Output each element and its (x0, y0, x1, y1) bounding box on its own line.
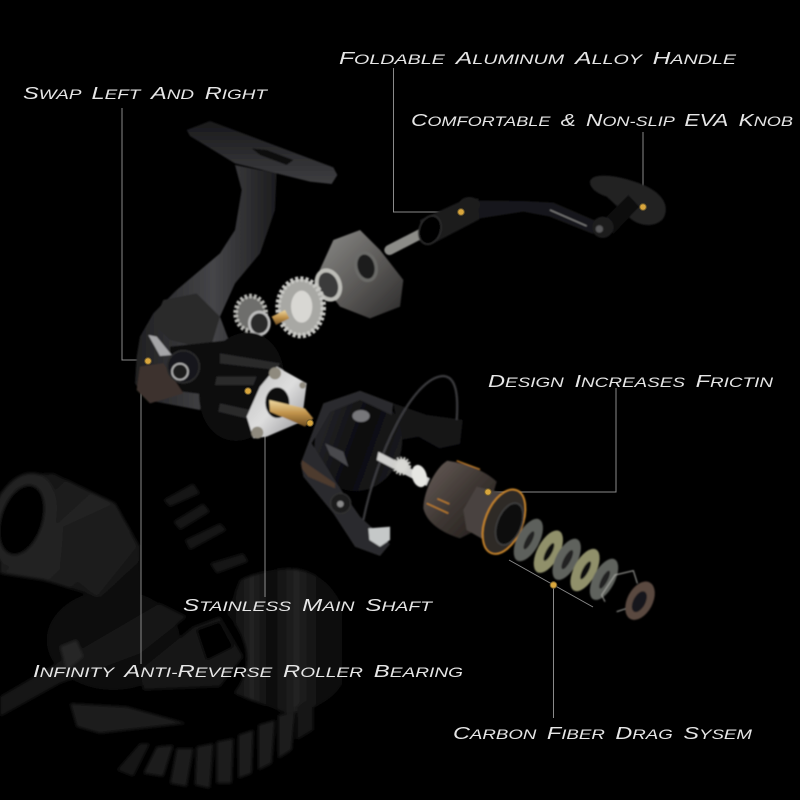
dot: spool (485, 489, 491, 495)
knob joint (592, 217, 613, 238)
spool body (423, 461, 497, 538)
dial (167, 351, 199, 383)
drag washer 4 (564, 544, 606, 596)
body dark connector (170, 340, 230, 397)
label: EVA knob: C OMFORTABLE & N ON-SLIP EVA KNOB (411, 110, 793, 130)
spring clip (602, 571, 637, 612)
label: anti-reverse bearing: INFINITY A NTI- R EVERSE R OLLER B EARING (33, 661, 463, 681)
label: swap left and right: S WAP LEFT A ND R IGHT (23, 83, 269, 103)
label: spool design: D ESIGN INCREASES F RICTIN (488, 371, 774, 391)
knob stem (605, 195, 639, 234)
label: drag system: C ARBON F IBER D RAG S YSEM (453, 723, 752, 743)
rotor frame (301, 391, 393, 556)
knob (590, 176, 666, 225)
brown trim (302, 460, 335, 488)
joint screw (596, 225, 603, 233)
arm (477, 201, 595, 234)
shaft (377, 452, 430, 486)
plate hole (265, 387, 289, 418)
dot: shaft (307, 420, 313, 426)
dot: handle (458, 209, 464, 215)
main gear (278, 279, 323, 336)
stem and body (135, 165, 277, 410)
drag cap (619, 576, 661, 625)
callout dots (145, 204, 646, 588)
threaded neck (463, 487, 510, 543)
leader: spool design (488, 388, 616, 492)
reel body and gears (135, 121, 403, 451)
drag cap center (629, 589, 650, 614)
spool orange marks (427, 461, 480, 513)
leader: foldable handle (394, 68, 461, 212)
leader: drag system (509, 560, 593, 718)
flange bore (490, 499, 529, 549)
leader: EVA knob (642, 132, 644, 207)
pivot screw (337, 501, 344, 507)
plate screws (251, 367, 306, 439)
small gear (236, 296, 266, 331)
foot slot (252, 148, 293, 165)
brass main shaft (269, 400, 313, 427)
brass bushing (272, 310, 289, 325)
hex shaft (389, 232, 425, 250)
rotor dome (301, 383, 416, 504)
arm highlight (550, 210, 587, 226)
handle assembly (389, 176, 666, 250)
rear cap (137, 363, 183, 403)
line roller (368, 527, 390, 547)
dial center (172, 364, 188, 380)
label: main shaft: S TAINLESS M AIN S HAFT (183, 595, 434, 615)
mounting plate (247, 367, 307, 438)
bail wire (363, 376, 457, 520)
body highlight (148, 335, 172, 356)
leader: main shaft (265, 423, 310, 597)
dot: bearing (245, 388, 251, 394)
washer (409, 463, 429, 489)
side plate (317, 230, 403, 318)
rotor and spool (301, 376, 661, 625)
pinion (394, 459, 409, 473)
dome logo (352, 410, 370, 422)
dot: knob (640, 204, 646, 210)
leader lines (122, 68, 643, 718)
dot: swap (145, 358, 151, 364)
housing ribs (215, 353, 280, 418)
drag washer 5 (584, 554, 624, 604)
dot: drag (550, 582, 557, 588)
background: ghosted gear assembly (0, 464, 353, 788)
gear hub (291, 291, 312, 323)
dome highlight (325, 443, 348, 467)
leader: swap left and right (122, 108, 148, 360)
flange (474, 483, 534, 560)
drag washer 1 (508, 514, 549, 566)
hinge (459, 197, 480, 213)
socket (420, 198, 479, 243)
drag washer 3 (547, 534, 587, 584)
bearing ring (313, 267, 344, 303)
drag washer 2 (528, 526, 569, 577)
body lower shell (153, 293, 220, 350)
housing cylinder (187, 323, 296, 451)
small gear ring (249, 312, 269, 335)
leader: anti-reverse bearing (141, 391, 248, 664)
rotor arm (393, 403, 463, 448)
socket mouth (415, 213, 445, 247)
side plate hole (353, 251, 379, 283)
rotor pivot (331, 493, 351, 513)
label: foldable handle: F OLDABLE A LUMINUM A LLOY H ANDLE (339, 48, 737, 68)
rod foot (187, 121, 337, 184)
